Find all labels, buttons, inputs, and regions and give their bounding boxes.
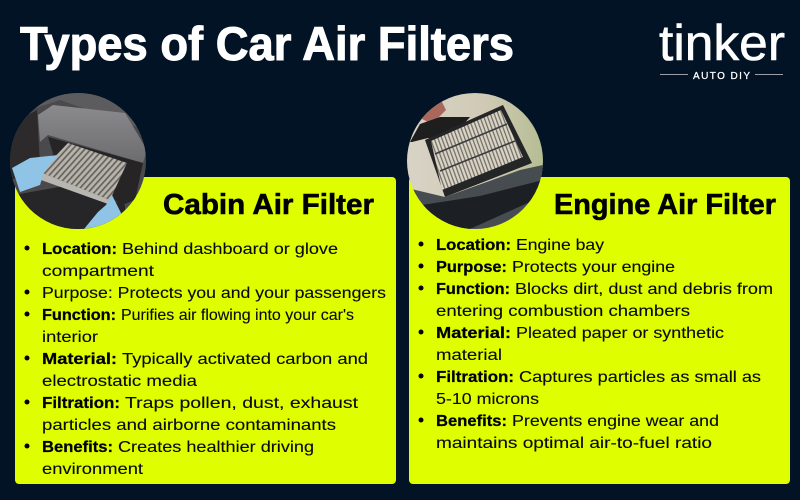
panel background: engine bbox=[409, 177, 790, 484]
item: location: Behind dashboard or glove bbox=[122, 241, 338, 258]
item: function: Function: bbox=[42, 307, 116, 324]
item: material: material bbox=[436, 347, 502, 364]
item: material: electrostatic media bbox=[42, 373, 197, 390]
item: function: Purifies air flowing into your car's bbox=[121, 307, 354, 324]
item: location bbox=[418, 237, 604, 254]
item: filtration bbox=[24, 395, 359, 434]
item: filtration: particles and airborne contaminants bbox=[42, 417, 336, 434]
logo: Tinker Auto DIY: AUTO DIY bbox=[693, 71, 750, 82]
item: material: Typically activated carbon and bbox=[122, 351, 368, 368]
panel background: cabin bbox=[15, 177, 396, 484]
list: engine filter facts bbox=[418, 237, 773, 452]
item: benefits bbox=[24, 439, 314, 478]
item: function: Blocks dirt, dust and debris from bbox=[515, 281, 773, 298]
item: filtration: Captures particles as small as bbox=[519, 369, 761, 386]
logo: Tinker Auto DIY: tinker bbox=[659, 15, 785, 71]
item: location: Location: bbox=[42, 241, 117, 258]
item: material bbox=[24, 351, 368, 390]
item: purpose: Protects your engine bbox=[512, 259, 675, 276]
photo: engine filter held above engine bay bbox=[407, 93, 543, 229]
panel: cabin air filter bbox=[10, 93, 396, 484]
item: benefits: Prevents engine wear and bbox=[512, 413, 719, 430]
item: function: interior bbox=[42, 329, 99, 346]
item: benefits: Creates healthier driving bbox=[118, 439, 314, 456]
title: Types of Car Air Filters bbox=[20, 17, 514, 70]
item: location: Location: bbox=[436, 237, 511, 254]
item: material: Material: bbox=[436, 325, 511, 342]
item: benefits bbox=[418, 413, 719, 452]
item: material bbox=[418, 325, 724, 364]
item: location: Engine bay bbox=[516, 237, 604, 254]
item: purpose: Purpose: Protects you and your passengers bbox=[42, 285, 386, 302]
item: function bbox=[24, 307, 354, 346]
item: filtration: Filtration: bbox=[436, 369, 514, 386]
heading: cabin air filter: Cabin Air Filter bbox=[163, 189, 374, 221]
item: function bbox=[418, 281, 773, 320]
item: benefits: environment bbox=[42, 461, 144, 478]
item: material: Pleated paper or synthetic bbox=[516, 325, 724, 342]
photo: cabin filter being removed from glove compartment bbox=[10, 93, 147, 229]
item: purpose bbox=[418, 259, 675, 276]
item: filtration: 5-10 microns bbox=[436, 391, 539, 408]
panel: engine air filter bbox=[407, 93, 790, 484]
item: purpose: Purpose: bbox=[436, 259, 507, 276]
item: benefits: Benefits: bbox=[436, 413, 507, 430]
item: filtration: Filtration: bbox=[42, 395, 120, 412]
item: filtration: Traps pollen, dust, exhaust bbox=[125, 395, 359, 412]
item: benefits: maintains optimal air-to-fuel ratio bbox=[436, 435, 712, 452]
item: material: Material: bbox=[42, 351, 117, 368]
item: location: compartment bbox=[42, 263, 155, 280]
list: cabin filter facts bbox=[24, 241, 386, 478]
item: benefits: Benefits: bbox=[42, 439, 113, 456]
item: filtration bbox=[418, 369, 761, 408]
item: function: Function: bbox=[436, 281, 510, 298]
heading: engine air filter: Engine Air Filter bbox=[554, 189, 776, 221]
item: location bbox=[24, 241, 338, 280]
item: function: entering combustion chambers bbox=[436, 303, 690, 320]
